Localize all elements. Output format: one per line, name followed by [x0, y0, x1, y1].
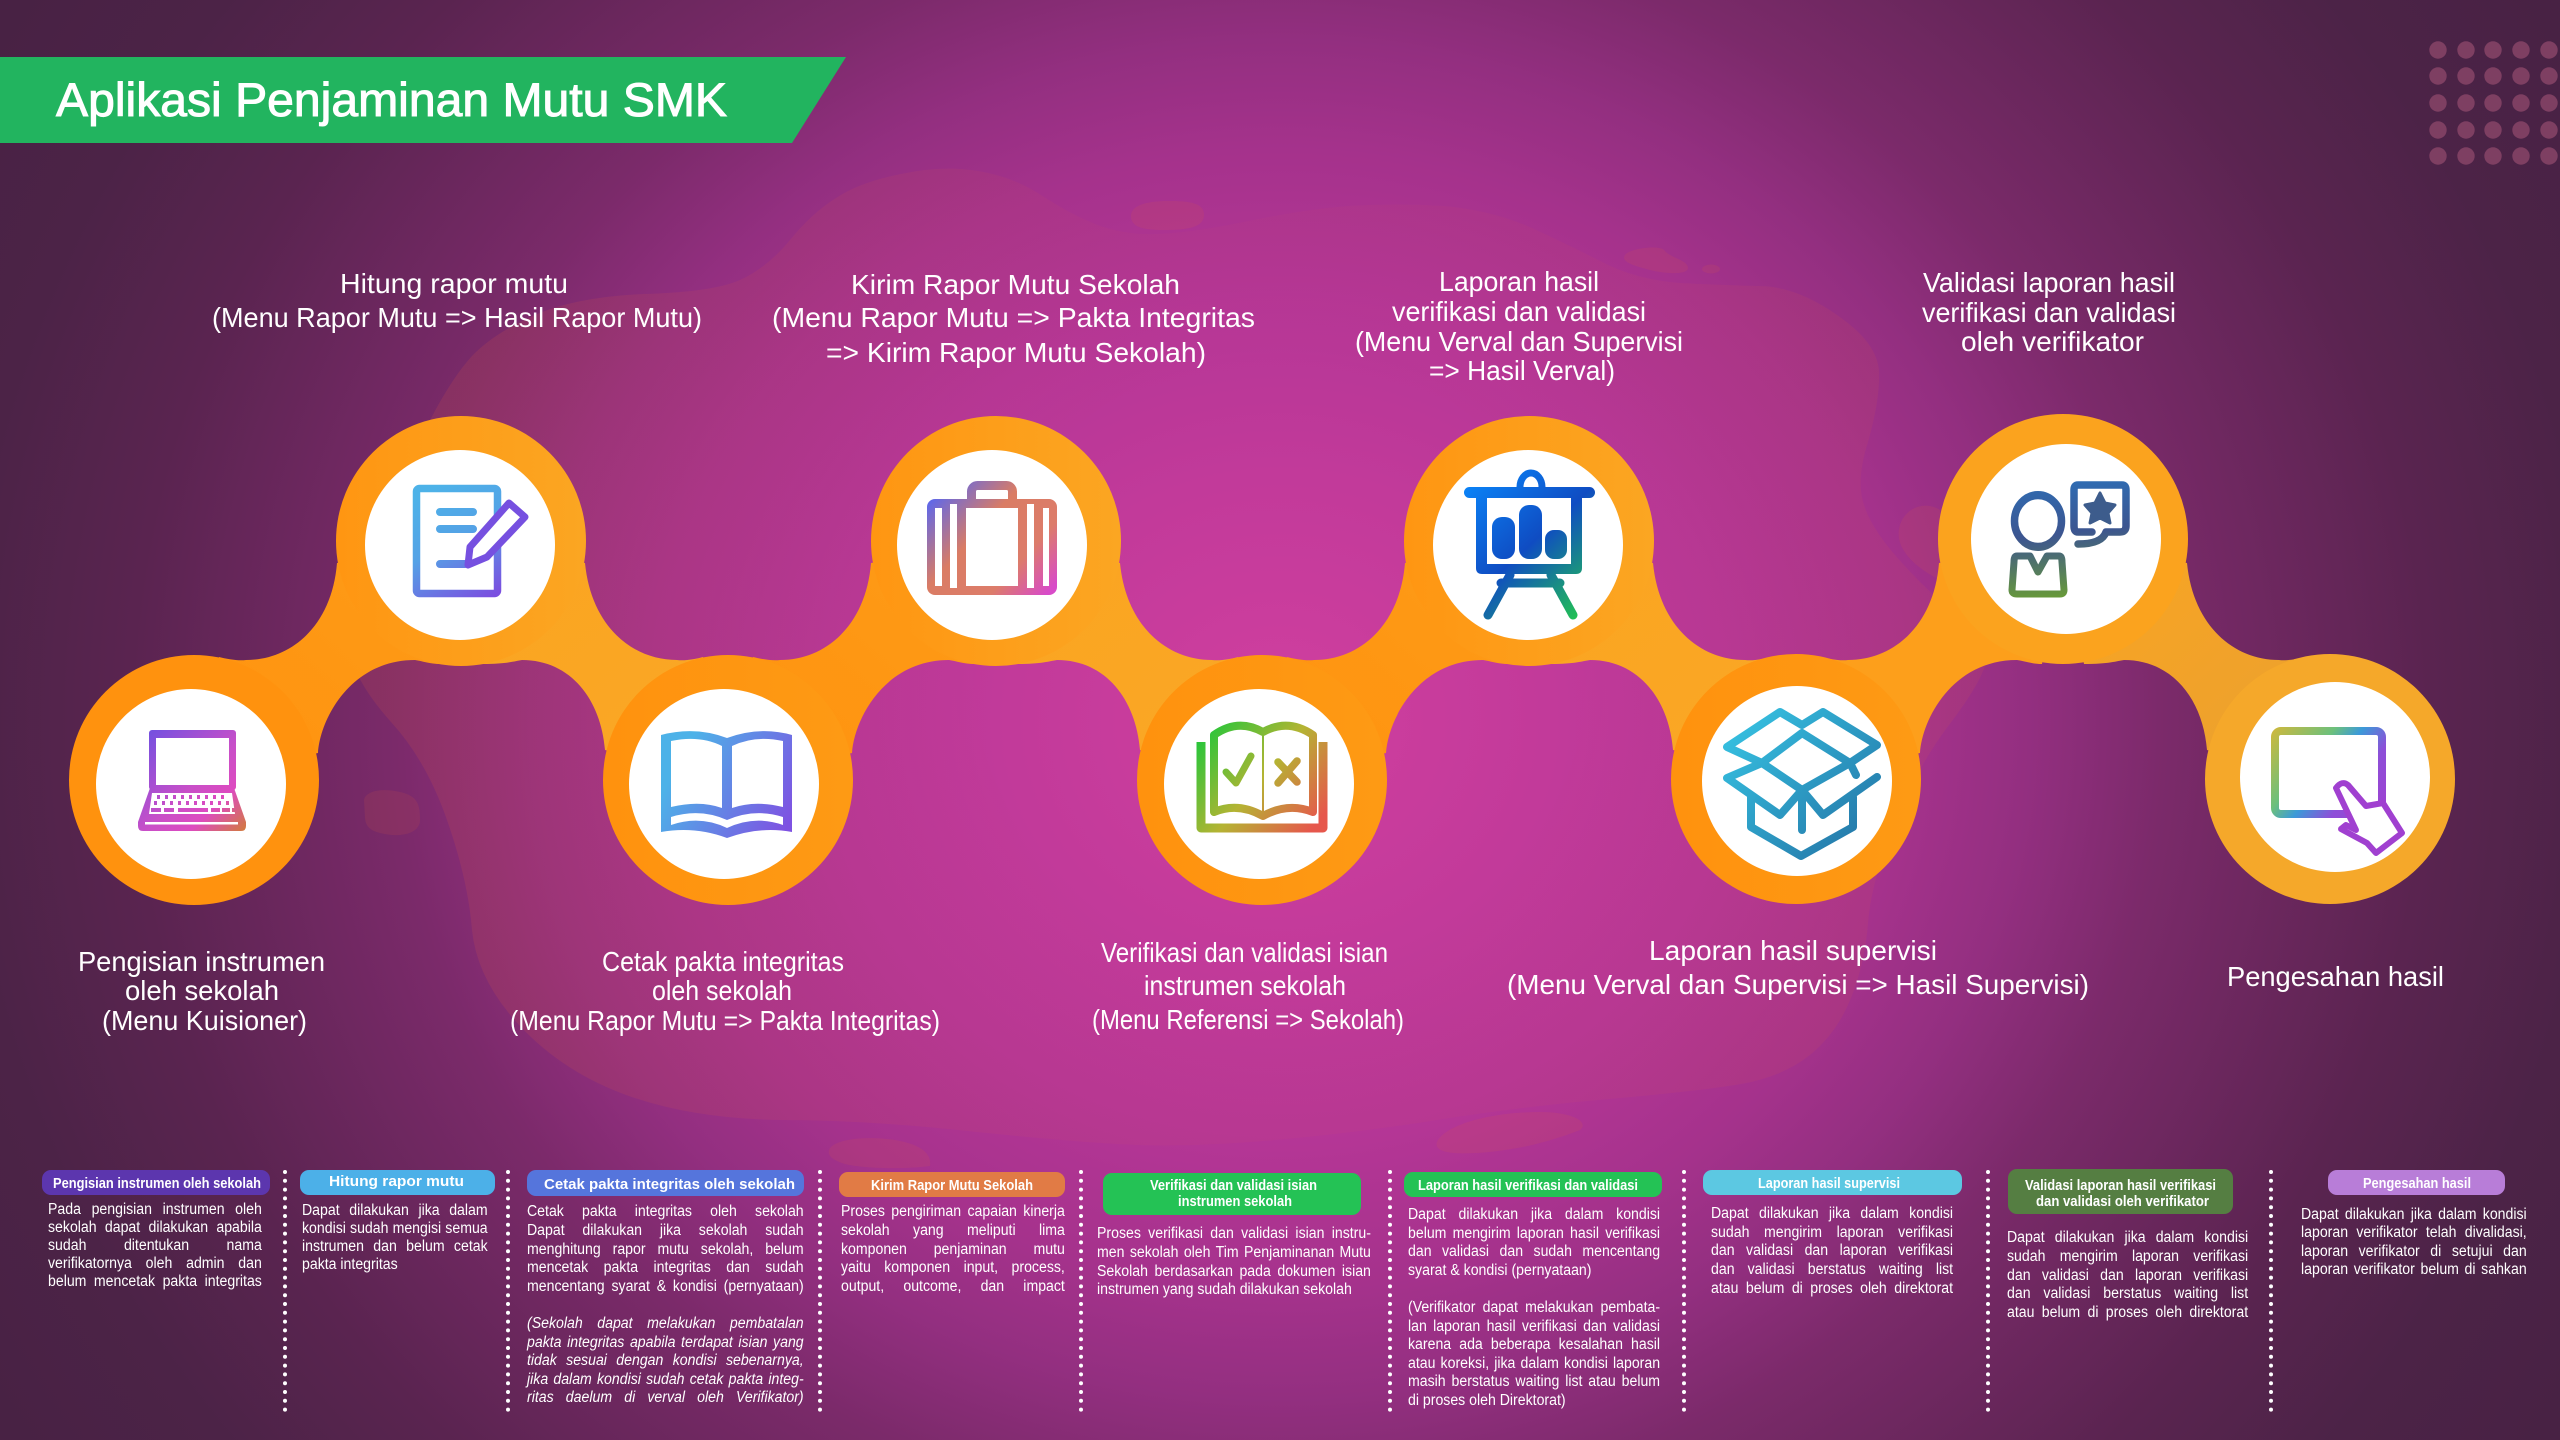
body text: Proses pengiriman capaian kinerja — [841, 1203, 1065, 1220]
pill heading: Validasi laporan hasil verifikasi — [2025, 1178, 2216, 1194]
label: Kirim Rapor Mutu Sekolah: Kirim Rapor Mutu Sekolah — [851, 269, 1180, 300]
body text: dan validasi dan sudah mencentang — [1408, 1243, 1660, 1260]
body text: men sekolah oleh Tim Penjaminanan Mutu — [1097, 1244, 1371, 1261]
pill heading: Hitung rapor mutu — [329, 1174, 464, 1190]
pill heading — [2008, 1169, 2233, 1214]
dotted column dividers — [285, 1172, 2271, 1417]
body text — [1097, 1225, 1371, 1298]
body text: verifikatornya oleh admin dan — [48, 1255, 262, 1272]
body text: (Sekolah dapat melakukan pembatalan — [527, 1315, 804, 1332]
body text — [1408, 1206, 1660, 1409]
body text: tidak sesuai dengan kondisi sebenarnya, — [527, 1352, 804, 1369]
pill heading: Verifikasi dan validasi isian — [1150, 1178, 1317, 1194]
body text: pakta integritas — [302, 1256, 398, 1273]
pill heading: Laporan hasil verifikasi dan validasi — [1418, 1178, 1638, 1194]
label: Cetak pakta integritas: Cetak pakta integritas — [602, 946, 844, 977]
body text: Dapat dilakukan jika dalam kondisi — [1711, 1205, 1953, 1222]
label: Verifikasi dan validasi isian: instrumen sekolah — [1144, 970, 1346, 1001]
label: Pengisian instrumen — [78, 946, 325, 1036]
body text: sudah ditentukan nama — [48, 1237, 262, 1254]
label: Laporan hasil verifikasi dan validasi: (Menu Verval dan Supervisi — [1355, 326, 1683, 357]
body text: (Verifikator dapat melakukan pembata- — [1408, 1299, 1660, 1316]
label: Validasi laporan hasil: oleh verifikator — [1961, 326, 2144, 357]
label: Cetak pakta integritas — [510, 946, 940, 1036]
body text: Cetak pakta integritas oleh sekolah — [527, 1203, 804, 1220]
body text: pakta integritas apabila terdapat isian yang — [527, 1334, 804, 1351]
label: Kirim Rapor Mutu Sekolah: => Kirim Rapor Mutu Sekolah) — [826, 337, 1206, 368]
body text: dan validasi dan laporan verifikasi — [2007, 1267, 2248, 1284]
label: Laporan hasil supervisi — [1507, 935, 2089, 1000]
body text: Sekolah berdasarkan pada dokumen isian — [1097, 1263, 1371, 1280]
label: Kirim Rapor Mutu Sekolah: (Menu Rapor Mutu => Pakta Integritas — [772, 302, 1255, 333]
body text — [841, 1203, 1065, 1295]
label: Verifikasi dan validasi isian: Verifikasi dan validasi isian — [1101, 937, 1388, 968]
label: Laporan hasil supervisi: (Menu Verval dan Supervisi => Hasil Supervisi) — [1507, 969, 2089, 1000]
body text: Dapat dilakukan jika dalam kondisi — [2007, 1229, 2248, 1246]
panel: Hitung rapor mutu — [300, 1170, 495, 1273]
pill heading: dan validasi oleh verifikator — [2036, 1194, 2209, 1210]
panel: Pengesahan hasil — [2301, 1170, 2527, 1278]
pill heading: Pengisian instrumen oleh sekolah — [53, 1176, 261, 1192]
body text: sekolah yang meliputi lima — [841, 1222, 1065, 1239]
icon: book with check and cross — [1201, 726, 1323, 828]
body text: belum mengirim laporan hasil verifikasi — [1408, 1225, 1660, 1242]
label: Laporan hasil verifikasi dan validasi: Laporan hasil — [1439, 266, 1599, 297]
label: Verifikasi dan validasi isian — [1092, 937, 1404, 1035]
process path: connected orange nodes — [69, 414, 2455, 905]
body text: Dapat dilakukan jika dalam — [302, 1202, 488, 1219]
title banner — [0, 57, 846, 143]
body text: syarat & kondisi (pernyataan) — [1408, 1262, 1591, 1279]
body text: dan validasi berstatus waiting list — [1711, 1261, 1953, 1278]
pill heading: Laporan hasil supervisi — [1758, 1176, 1900, 1192]
icon: laptop — [138, 730, 246, 831]
pill heading: Pengesahan hasil — [2363, 1176, 2471, 1192]
body text: dan validasi dan laporan verifikasi — [1711, 1242, 1953, 1259]
icon: person with star speech bubble — [2012, 485, 2126, 594]
label: Cetak pakta integritas: oleh sekolah — [652, 975, 792, 1006]
body text: laporan verifikator telah divalidasi, — [2301, 1224, 2527, 1241]
panel: Kirim Rapor Mutu Sekolah — [839, 1172, 1065, 1295]
panel: Validasi laporan hasil verifikasi dan validasi oleh verifikator — [2007, 1169, 2248, 1321]
body text: sudah mengirim laporan verifikasi — [1711, 1224, 1953, 1241]
body text: Pada pengisian instrumen oleh — [48, 1201, 262, 1218]
pill heading — [2328, 1170, 2505, 1195]
pill heading — [1404, 1172, 1662, 1197]
body text: masih berstatus waiting list atau belum — [1408, 1373, 1660, 1390]
panel: Pengisian instrumen oleh sekolah — [42, 1170, 270, 1290]
body text: dan validasi berstatus waiting list — [2007, 1285, 2248, 1302]
pill heading — [1103, 1173, 1361, 1215]
body text: Dapat dilakukan jika sekolah sudah — [527, 1222, 804, 1239]
body text: jika dalam kondisi sudah cetak pakta integ- — [527, 1371, 804, 1388]
icon: presentation board — [1464, 473, 1595, 615]
label: Laporan hasil verifikasi dan validasi: verifikasi dan validasi — [1392, 296, 1646, 327]
label: Verifikasi dan validasi isian: (Menu Referensi => Sekolah) — [1092, 1004, 1404, 1035]
body text: atau koreksi, jika dalam kondisi laporan — [1408, 1355, 1660, 1372]
panel: Verifikasi dan validasi isian instrumen sekolah — [1097, 1173, 1371, 1298]
body text: instrumen yang sudah dilakukan sekolah — [1097, 1281, 1352, 1298]
label: Cetak pakta integritas: (Menu Rapor Mutu => Pakta Integritas) — [510, 1005, 940, 1036]
label: Hitung rapor mutu: Hitung rapor mutu — [340, 268, 568, 299]
label: Pengisian instrumen: oleh sekolah — [125, 975, 279, 1006]
label: Pengisian instrumen: (Menu Kuisioner) — [102, 1005, 307, 1036]
pill heading — [527, 1170, 804, 1196]
body text: mencetak pakta integritas dan sudah — [527, 1259, 804, 1276]
icon: tablet and tapping hand — [2275, 731, 2402, 853]
pill heading — [300, 1170, 495, 1195]
panel: Laporan hasil verifikasi dan validasi — [1404, 1172, 1662, 1409]
body text: laporan verifikator di setujui dan — [2301, 1243, 2527, 1260]
icon: document and pencil — [416, 488, 525, 594]
pill heading — [42, 1170, 270, 1195]
label: Pengesahan hasil: Pengesahan hasil — [2227, 961, 2444, 992]
body text: lan laporan hasil verifikasi dan validasi — [1408, 1318, 1660, 1335]
body text: sekolah dapat dilakukan apabila — [48, 1219, 262, 1236]
body text — [2301, 1206, 2527, 1278]
body text: kondisi sudah mengisi semua — [302, 1220, 488, 1237]
body text: karena ada beberapa kesalahan hasil — [1408, 1336, 1660, 1353]
icon: briefcase — [927, 486, 1057, 595]
body text: yaitu komponen input, process, — [841, 1259, 1065, 1276]
body text — [1711, 1205, 1953, 1297]
title banner: Aplikasi Penjaminan Mutu SMK — [56, 73, 727, 126]
body text: atau belum di proses oleh direktorat — [1711, 1280, 1953, 1297]
icon: open book — [661, 731, 792, 838]
body text: Dapat dilakukan jika dalam kondisi — [1408, 1206, 1660, 1223]
body text: atau belum di proses oleh direktorat — [2007, 1304, 2248, 1321]
label: Validasi laporan hasil — [1922, 267, 2176, 357]
background blob — [349, 169, 1986, 1168]
label: Pengisian instrumen: Pengisian instrumen — [78, 946, 325, 977]
body text — [2007, 1229, 2248, 1321]
body text: komponen penjaminan mutu — [841, 1241, 1065, 1258]
body text: sudah mengirim laporan verifikasi — [2007, 1248, 2248, 1265]
label: Laporan hasil verifikasi dan validasi: => Hasil Verval) — [1429, 355, 1615, 386]
label: Validasi laporan hasil: Validasi laporan hasil — [1923, 267, 2175, 298]
label: Hitung rapor mutu: (Menu Rapor Mutu => Hasil Rapor Mutu) — [212, 302, 702, 333]
label: Validasi laporan hasil: verifikasi dan validasi — [1922, 297, 2176, 328]
label: Laporan hasil verifikasi dan validasi — [1355, 266, 1683, 386]
label: Laporan hasil supervisi: Laporan hasil supervisi — [1649, 935, 1937, 966]
panel: Laporan hasil supervisi — [1703, 1170, 1962, 1297]
pill heading — [1703, 1170, 1962, 1195]
body text: ritas daelum di verval oleh Verifikator) — [527, 1389, 804, 1406]
label: Kirim Rapor Mutu Sekolah — [772, 269, 1255, 368]
body text: mencentang syarat & kondisi (pernyataan) — [527, 1278, 804, 1295]
body text: Proses verifikasi dan validasi isian instru- — [1097, 1225, 1371, 1242]
body text: laporan verifikator belum di sahkan — [2301, 1261, 2527, 1278]
pill heading — [839, 1172, 1065, 1197]
body text — [525, 1203, 804, 1406]
body text: menghitung rapor mutu sekolah, belum — [527, 1241, 804, 1258]
body text: di proses oleh Direktorat) — [1408, 1392, 1566, 1409]
panel: Cetak pakta integritas oleh sekolah — [525, 1170, 804, 1406]
body text — [48, 1201, 262, 1290]
pill heading: Cetak pakta integritas oleh sekolah — [544, 1177, 795, 1193]
body text — [302, 1202, 488, 1273]
body text: belum mencetak pakta integritas — [48, 1273, 262, 1290]
body text: output, outcome, dan impact — [841, 1278, 1065, 1295]
icon: open box — [1727, 712, 1877, 856]
pill heading: instrumen sekolah — [1178, 1194, 1292, 1210]
label: Hitung rapor mutu — [212, 268, 702, 333]
body text: instrumen dan belum cetak — [302, 1238, 488, 1255]
decorative dot grid — [2429, 41, 2558, 165]
pill heading: Kirim Rapor Mutu Sekolah — [871, 1178, 1033, 1194]
body text: Dapat dilakukan jika dalam kondisi — [2301, 1206, 2527, 1223]
